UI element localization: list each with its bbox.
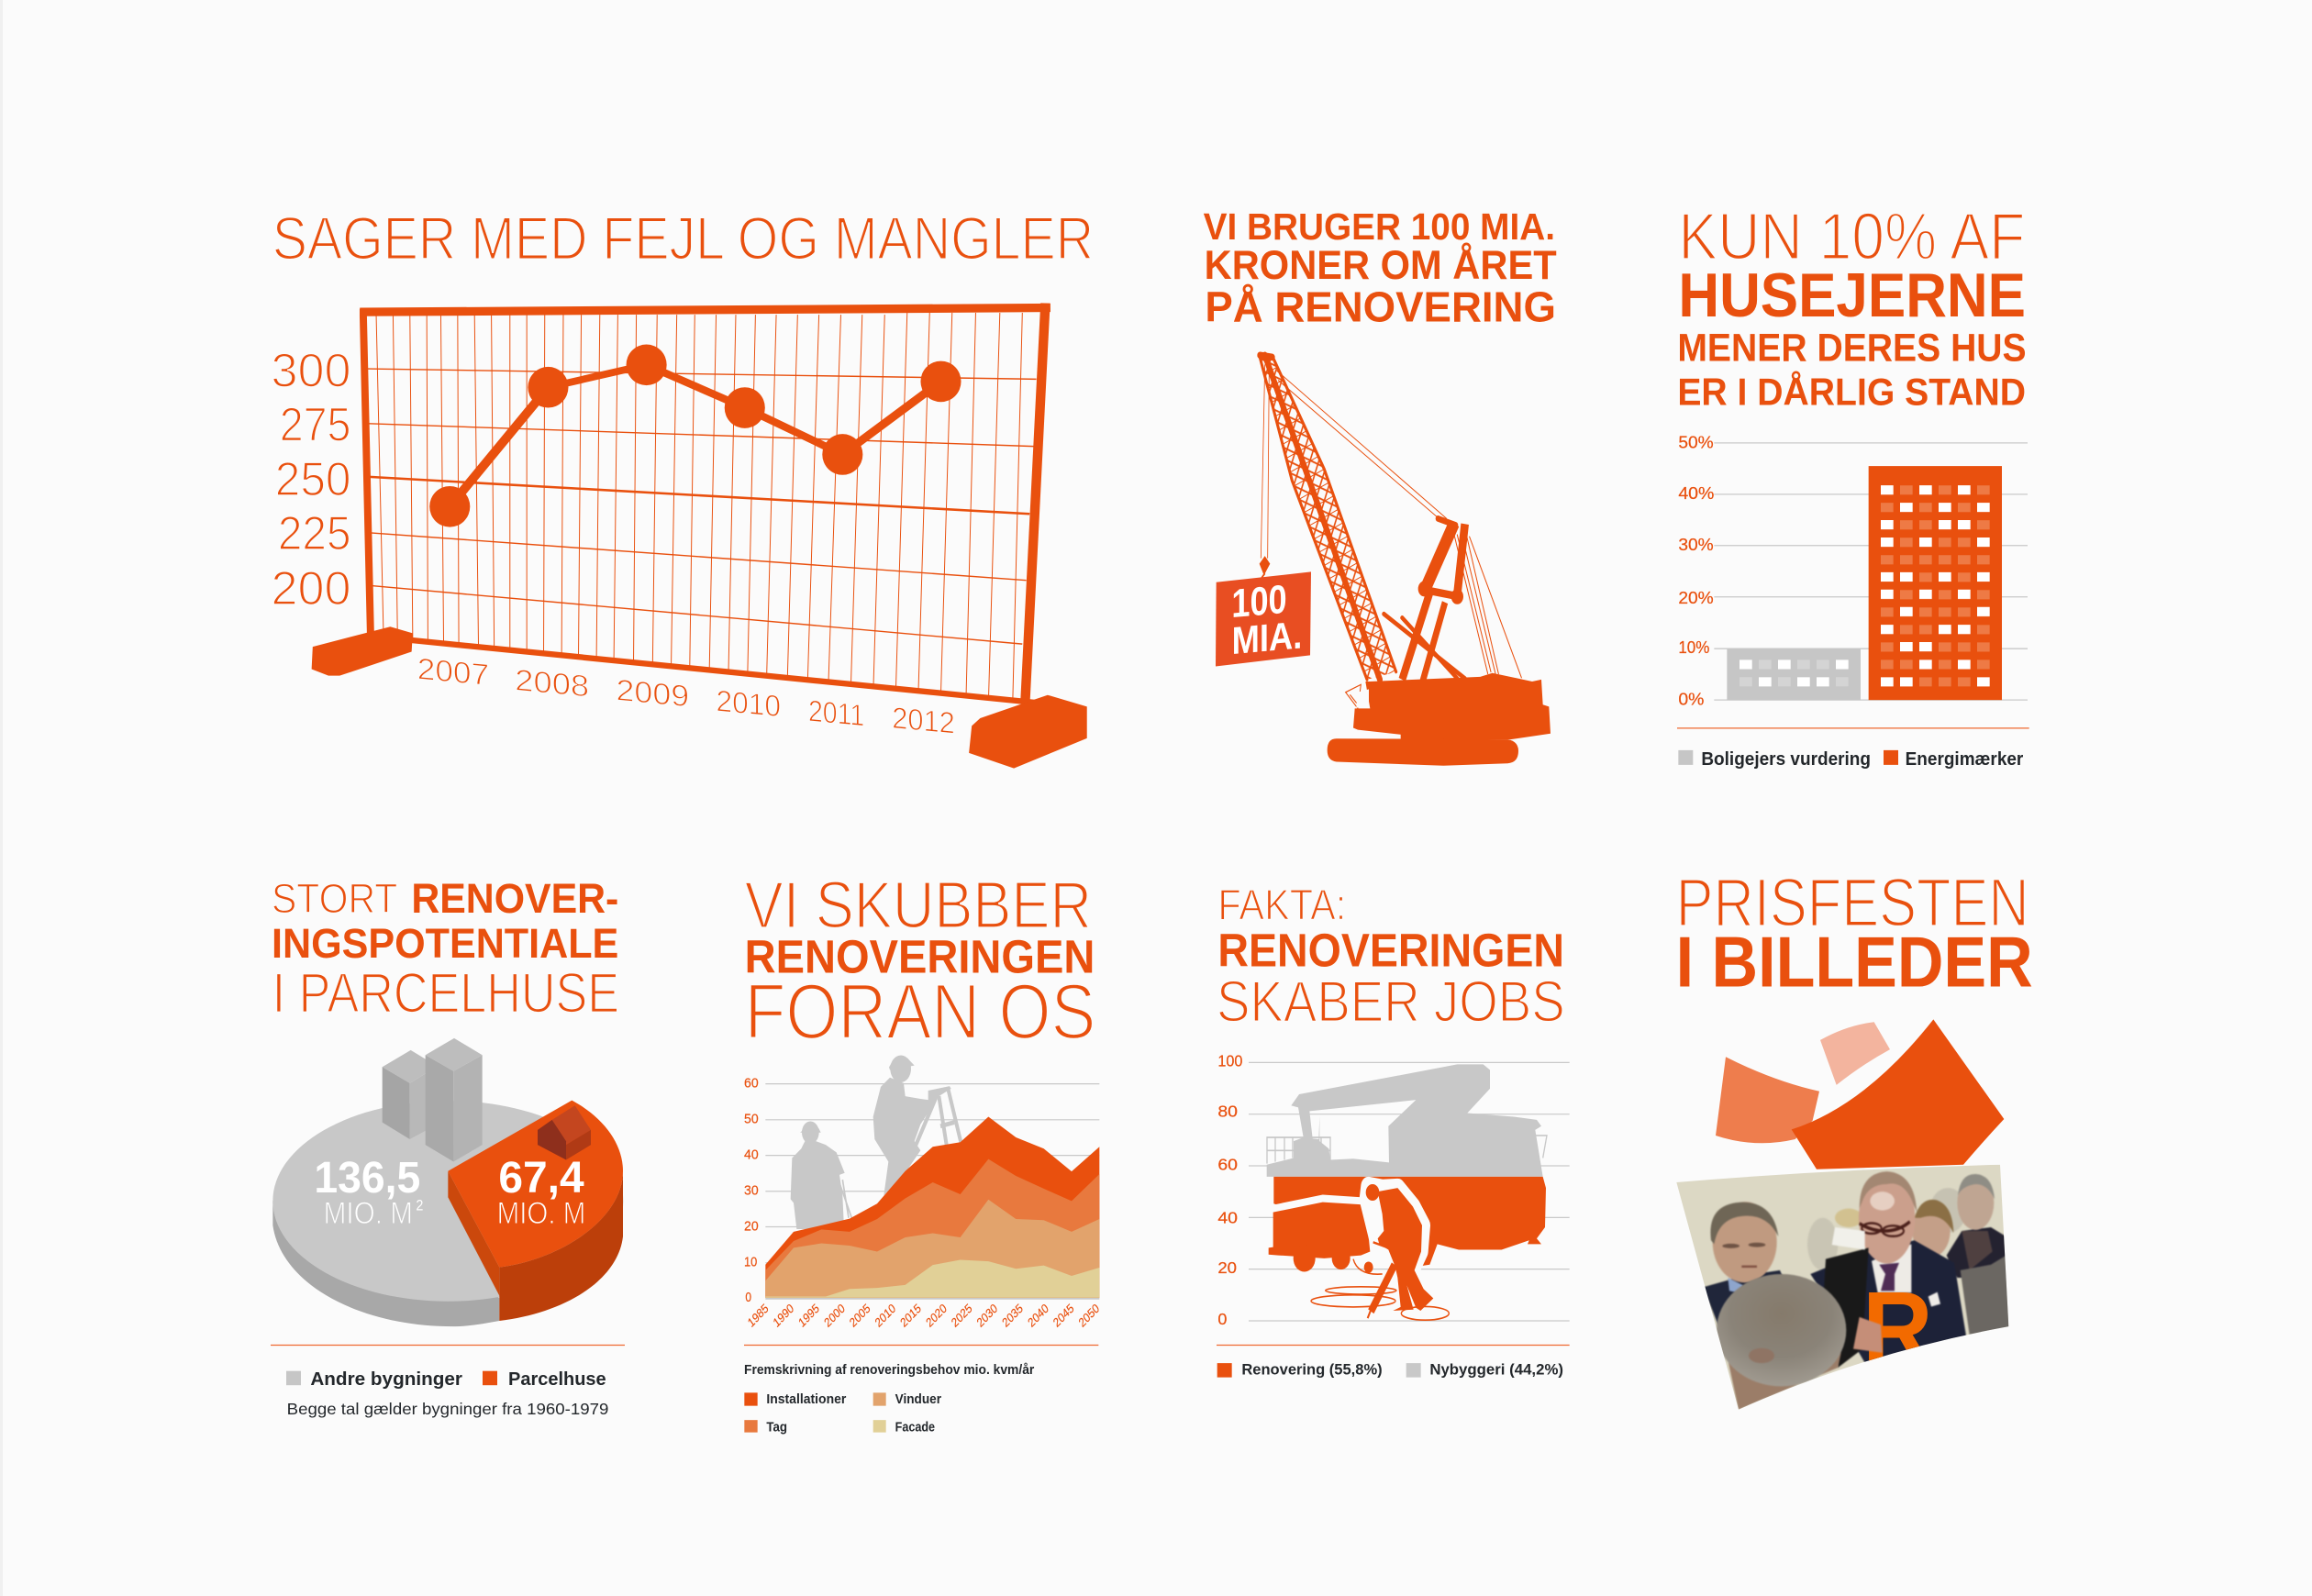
heading: kun 10% af husejerne: HUSEJERNE [1678, 260, 2026, 330]
heading: kun 10% af husejerne: ER I DÅRLIG STAND [1677, 370, 2026, 415]
legend: Installationer [766, 1391, 847, 1406]
value: parcelhuse: MIO. M [497, 1195, 585, 1231]
heading: vi bruger 100 mia [1204, 205, 1557, 330]
year labels: 2008 [515, 663, 589, 704]
heading: stort renoveringspotentiale: INGSPOTENTIALE [272, 919, 618, 967]
crane illustration [1260, 355, 1551, 766]
pictogram chart: 20 [1217, 1260, 1237, 1278]
fence foot left [312, 626, 413, 676]
x axis labels: 2005 [848, 1302, 873, 1330]
legend: Andre bygninger [310, 1368, 462, 1389]
heading: fakta renoveringen skaber jobs: SKABER JOBS [1217, 970, 1565, 1035]
y axis labels: 300 [272, 343, 350, 397]
year labels: 2010 [717, 683, 781, 724]
line chart [429, 345, 961, 527]
bar chart [1678, 433, 2028, 709]
heading: stort renoveringspotentiale: STORT [272, 874, 397, 922]
heading: prisfesten i billeder: PRISFESTEN [1676, 866, 2029, 941]
y axis labels: 40 [744, 1147, 759, 1162]
area chart [744, 1056, 1102, 1330]
legend [286, 1368, 608, 1418]
heading: fakta renoveringen skaber jobs [1217, 881, 1565, 1035]
sign: 100 mia: MIA. [1232, 615, 1302, 663]
x axis labels: 2045 [1051, 1302, 1076, 1330]
bar chart: 20% [1678, 588, 1714, 607]
value: andre bygninger: 2 [416, 1198, 423, 1214]
y axis labels: 10 [744, 1254, 757, 1269]
heading: kun 10% af husejerne: MENER DERES HUS [1677, 327, 2027, 371]
bar chart: 40% [1678, 483, 1715, 503]
x axis labels: 2030 [974, 1302, 1000, 1330]
heading: vi skubber renoveringen foran os: RENOVERINGEN [745, 930, 1095, 982]
panel: fakta renoveringen skaber jobs [1217, 881, 1570, 1379]
back right man [1947, 1227, 2006, 1278]
pictogram chart: 100 [1217, 1053, 1243, 1070]
heading: stort renoveringspotentiale [272, 874, 619, 1024]
bar chart: 0% [1678, 690, 1705, 709]
y axis labels: 0 [745, 1290, 751, 1304]
bar: energimaerker [1869, 466, 2002, 700]
heading: sager med fejl og mangler: SAGER MED FEJL OG MANGLER [272, 205, 1094, 272]
hands [1853, 1317, 1883, 1353]
heading: fakta renoveringen skaber jobs: FAKTA: [1217, 881, 1346, 929]
fence frame [363, 309, 371, 635]
pictogram chart [1217, 1053, 1570, 1328]
left man [1704, 1270, 1798, 1326]
legend: Parcelhuse [508, 1368, 606, 1389]
panel: kun 10% af husejerne [1677, 199, 2029, 769]
year labels: 2011 [808, 693, 864, 733]
panel: vi skubber renoveringen foran os [744, 868, 1102, 1435]
pictogram chart: 0 [1217, 1312, 1228, 1328]
value: andre bygninger: 136,5 [314, 1153, 420, 1203]
legend: Energimærker [1906, 748, 2023, 769]
back middle man [1912, 1215, 1951, 1255]
3d pie chart [272, 1038, 623, 1326]
heading: kun 10% af husejerne [1677, 199, 2027, 415]
x axis labels [746, 1302, 1102, 1330]
paper shape: large [1792, 1019, 2004, 1169]
y axis labels: 225 [278, 506, 350, 560]
legend [1678, 748, 2023, 769]
icon: house [538, 1105, 591, 1159]
center man [1810, 1240, 1966, 1364]
camera [1823, 1247, 1869, 1368]
y axis labels: 250 [275, 452, 350, 505]
legend [1217, 1362, 1563, 1379]
y axis labels: 275 [280, 397, 350, 451]
heading: kun 10% af husejerne: KUN 10% AF [1678, 199, 2025, 273]
pictogram chart: 80 [1217, 1103, 1238, 1121]
y axis labels: 30 [744, 1182, 759, 1198]
x axis labels: 2035 [1000, 1302, 1025, 1330]
panel: vi bruger 100 mia [1204, 205, 1557, 766]
award letter: R [1862, 1269, 1933, 1389]
heading: vi skubber renoveringen foran os [745, 868, 1095, 1055]
x axis labels: 2040 [1026, 1302, 1050, 1330]
panel: prisfesten i billeder [1670, 866, 2033, 1416]
truck: renovering share [1269, 1177, 1546, 1273]
sign: 100 mia: 100 [1231, 577, 1287, 626]
heading: vi skubber renoveringen foran os: FORAN OS [745, 967, 1095, 1055]
x axis labels: 1995 [796, 1302, 821, 1330]
legend [744, 1391, 942, 1435]
y axis labels: 50 [744, 1111, 759, 1126]
x axis labels: 2010 [873, 1302, 898, 1330]
value: parcelhuse [497, 1153, 585, 1231]
heading: prisfesten i billeder [1676, 866, 2033, 1003]
worker with jackhammer [1366, 1184, 1433, 1318]
fence foot right [969, 695, 1087, 769]
x axis labels: 2000 [822, 1302, 847, 1330]
heading: fakta renoveringen skaber jobs: RENOVERINGEN [1217, 924, 1564, 976]
panel: sager med fejl og mangler [272, 205, 1094, 769]
heading: vi skubber renoveringen foran os: VI SKUBBER [745, 868, 1092, 942]
paper shape: medium [1716, 1057, 1819, 1143]
heading: stort renoveringspotentiale: I PARCELHUSE [272, 960, 619, 1024]
x axis labels: 1990 [771, 1302, 796, 1330]
year labels: 2012 [892, 701, 955, 740]
y axis labels: 60 [744, 1076, 759, 1091]
legend: Facade [895, 1419, 935, 1435]
icon: tall buildings [383, 1038, 483, 1162]
value: andre bygninger [314, 1153, 423, 1231]
heading: stort renoveringspotentiale: RENOVER- [411, 874, 618, 922]
worker silhouette: standing [791, 1121, 851, 1229]
sign: 100 mia [1216, 571, 1311, 667]
fence mesh [368, 313, 1037, 699]
legend: Begge tal gælder bygninger fra 1960-1979 [287, 1401, 608, 1418]
legend: Boligejers vurdering [1701, 748, 1871, 769]
legend: Nybyggeri (44,2%) [1429, 1362, 1563, 1379]
paper shape: light [1820, 1022, 1890, 1085]
worker silhouette: on ladder [873, 1056, 961, 1195]
bar chart: 50% [1678, 433, 1714, 452]
chart caption: Fremskrivning af renoveringsbehov mio. kvm/år [744, 1362, 1035, 1377]
x axis labels: 2050 [1076, 1302, 1102, 1330]
bar chart: 30% [1678, 535, 1714, 554]
x axis labels: 2015 [898, 1302, 923, 1330]
year labels [417, 651, 955, 740]
foreground head [1728, 1353, 1841, 1410]
value: parcelhuse: 67,4 [498, 1153, 584, 1203]
hose [1311, 1259, 1449, 1320]
x axis labels: 2025 [950, 1302, 974, 1330]
gray suit right [1961, 1256, 2011, 1335]
y axis labels: 200 [272, 561, 350, 615]
pictogram chart: 40 [1217, 1210, 1238, 1227]
y axis labels [744, 1076, 759, 1304]
heading: vi bruger 100 mia: VI BRUGER 100 MIA. [1204, 205, 1555, 248]
value: andre bygninger: MIO. M [324, 1195, 413, 1231]
heading: vi bruger 100 mia: PÅ RENOVERING [1205, 283, 1556, 330]
y axis labels: 20 [744, 1218, 759, 1234]
truck: nybyggeri share [1267, 1064, 1547, 1177]
photo: award winners [1670, 1158, 2016, 1416]
year labels: 2007 [417, 651, 489, 692]
y axis labels [272, 343, 350, 615]
heading: vi bruger 100 mia: KRONER OM ÅRET [1205, 242, 1557, 288]
legend: Renovering (55,8%) [1241, 1362, 1383, 1379]
x axis labels: 1985 [746, 1302, 771, 1330]
bar: boligejers vurdering [1727, 648, 1861, 700]
legend: Vinduer [895, 1391, 942, 1406]
legend: Tag [766, 1419, 787, 1435]
bar chart: 10% [1678, 637, 1709, 657]
pictogram chart: 60 [1217, 1157, 1238, 1174]
heading: prisfesten i billeder: I BILLEDER [1676, 922, 2033, 1003]
x axis labels: 2020 [924, 1302, 949, 1330]
back woman hair [1835, 1209, 1862, 1227]
year labels: 2009 [617, 673, 689, 714]
panel: stort renoveringspotentiale [271, 874, 625, 1418]
